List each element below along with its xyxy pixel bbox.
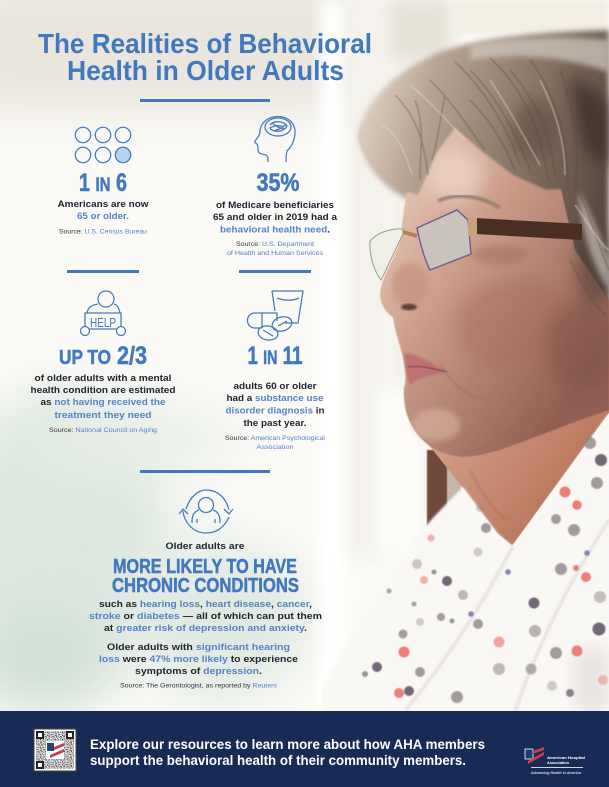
panel: 35% <box>213 116 338 257</box>
heading: more likely: MORE LIKELY TO HAVE <box>113 555 297 578</box>
text: Americans: Americans are now <box>58 199 149 210</box>
call to action <box>90 737 485 768</box>
heading: more likely <box>112 555 299 597</box>
title: The Realities of Behavioral <box>38 28 372 59</box>
source: Source: U.S. Census Bureau <box>59 228 148 236</box>
icon: six circles, one filled <box>75 127 131 163</box>
text: conditions: at greater risk of depression and anxiety . <box>104 623 307 634</box>
text: mental health: of older adults with a mental <box>34 373 172 384</box>
text: Medicare: of Medicare beneficiaries <box>216 200 334 211</box>
text: conditions: stroke or diabetes — all of which can put them <box>89 611 322 622</box>
photo: older woman looking out of window <box>358 30 609 546</box>
stat: up to 2/3: UP TO 2/3 <box>59 342 147 370</box>
text: substance use: had a substance use <box>226 393 324 404</box>
icon: person with cycle arrows <box>179 490 233 533</box>
icon: person holding help sign: HELP <box>90 316 116 330</box>
panel: 1 in 6 <box>58 127 149 236</box>
panel: 1 in 11 <box>225 291 325 451</box>
text: mental health <box>30 373 176 421</box>
text: Americans <box>58 199 149 222</box>
text: Medicare <box>213 200 338 236</box>
icon: head with brain <box>255 116 295 162</box>
source: Association <box>256 444 294 451</box>
footer banner <box>0 711 609 787</box>
source: Source: American Psychological <box>225 435 325 442</box>
patterned scarf <box>320 413 609 787</box>
stat: 1 in 6: 1 IN 6 <box>79 169 127 197</box>
text: mental health: treatment they need <box>54 410 152 421</box>
stat: 35%: 35% <box>256 169 300 197</box>
text: hearing loss <box>99 642 298 677</box>
icon: person holding help sign <box>80 291 126 336</box>
nostril <box>401 304 417 310</box>
hair strands <box>395 58 609 315</box>
source: Source: The Gerontologist, as reported by Reuters <box>120 682 277 690</box>
logo: American Hospital Association <box>525 747 585 775</box>
call to action: support the behavioral health of their community members. <box>90 753 466 768</box>
heading: more likely: CHRONIC CONDITIONS <box>112 574 299 597</box>
text: mental health: as not having received the <box>40 397 166 408</box>
stat: 1 in 11: 1 IN 11 <box>248 342 303 370</box>
source <box>225 435 325 451</box>
QR code <box>34 729 76 771</box>
source: of Health and Human Services <box>227 250 323 257</box>
source: Source: National Council on Aging <box>49 427 158 434</box>
skin creases <box>440 362 522 520</box>
text: substance use: adults 60 or older <box>234 381 317 392</box>
text: Medicare: behavioral health need . <box>220 224 330 236</box>
text: conditions: such as hearing loss , heart disease , cancer, <box>99 599 312 610</box>
text: substance use: disorder diagnosis in <box>226 406 325 416</box>
eyebrow <box>438 196 500 208</box>
text: substance use <box>226 381 325 429</box>
fringe <box>358 72 572 195</box>
panel: up to 2/3 <box>30 291 176 434</box>
text: older adults are: Older adults are <box>166 541 244 552</box>
logo: American Hospital Association: Association <box>547 761 570 765</box>
logo: American Hospital Association: American Hospital <box>547 756 585 760</box>
dark hair shadows <box>511 75 609 305</box>
text: hearing loss: symptoms of depression . <box>135 666 262 677</box>
scarf dots <box>398 437 606 703</box>
hair back <box>358 30 609 345</box>
text: hearing loss: Older adults with significant hearing <box>107 642 290 653</box>
neck <box>425 300 609 546</box>
text: Medicare: 65 and older in 2019 had a <box>213 212 338 223</box>
panel: chronic conditions <box>89 490 322 690</box>
text: hearing loss: loss were 47% more likely to experience <box>99 654 298 665</box>
title <box>38 28 372 86</box>
title: Health in Older Adults <box>67 55 344 86</box>
text: Americans: 65 or older. <box>77 211 129 222</box>
icon: glass and pills <box>248 291 303 342</box>
source: Source: U.S. Department <box>236 241 314 248</box>
text: mental health: health condition are estimated <box>30 385 176 396</box>
text: conditions <box>89 599 322 634</box>
glasses <box>417 210 471 270</box>
face <box>380 125 609 457</box>
text: substance use: the past year. <box>244 418 306 429</box>
source <box>227 241 323 257</box>
call to action: Explore our resources to learn more about how AHA members <box>90 737 485 752</box>
lips <box>404 354 447 385</box>
logo: American Hospital Association: Advancing Health in America <box>530 771 581 775</box>
grey top of hair <box>470 37 609 72</box>
